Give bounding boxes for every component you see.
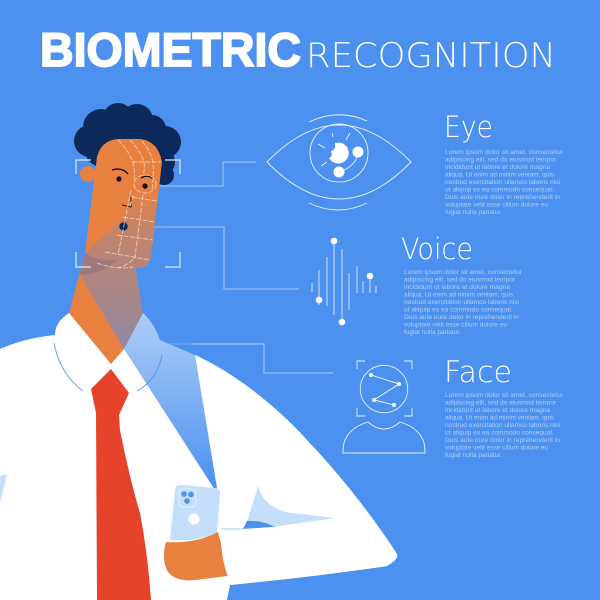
forearm xyxy=(221,518,390,585)
tie xyxy=(91,369,151,600)
text: face: Duis aute irure dolor in reprehenderit in xyxy=(445,437,560,444)
icon: voice waveform xyxy=(312,238,376,325)
face scan frame xyxy=(76,160,180,267)
text: voice: Lorem ipsum dolor sit amet, consectetur xyxy=(404,269,523,276)
text: voice xyxy=(401,232,523,336)
text: eye: Duis aute irure dolor in reprehenderit in xyxy=(445,194,560,201)
face features xyxy=(112,169,153,231)
hand xyxy=(164,532,228,580)
neck shadow xyxy=(79,253,117,275)
sleeve fold xyxy=(243,486,335,529)
text: face: voluptate velit esse cillum dolore eu xyxy=(445,444,548,452)
text: face: ut aliquip ex ea commodo consequat. xyxy=(445,430,554,436)
title xyxy=(40,23,556,76)
shirt xyxy=(0,313,397,600)
text: voice: ut aliquip ex ea commodo consequat. xyxy=(404,306,513,314)
connector lines xyxy=(133,162,333,373)
collar lines xyxy=(54,343,162,391)
hair xyxy=(74,103,181,185)
text: voice: adipiscing elit, sed do eiusmod tempor xyxy=(404,276,516,284)
head xyxy=(85,139,162,268)
face scan mesh xyxy=(97,140,161,268)
text: voice: fugiat nulla pariatur. xyxy=(404,329,461,336)
text: voice: aliqua. Ut enim ad minim veniam, quis xyxy=(404,292,513,298)
text: eye: Lorem ipsum dolor sit amet, consectetur xyxy=(445,149,564,156)
text: eye: voluptate velit esse cillum dolore eu xyxy=(445,202,548,208)
text: voice: nostrud exercitation ullamco laboris nisi xyxy=(404,299,519,306)
scan beam xyxy=(79,190,217,490)
text: face: aliqua. Ut enim ad minim veniam, quis xyxy=(445,414,554,422)
text: eye xyxy=(444,110,564,216)
text: eye: aliqua. Ut enim ad minim veniam, quis xyxy=(445,172,554,178)
text: voice: incididunt ut labore et dolore magna xyxy=(404,284,510,291)
text: face: incididunt ut labore et dolore magna xyxy=(445,407,550,414)
neck xyxy=(69,253,143,364)
ear xyxy=(80,166,96,182)
icon: eye xyxy=(267,115,411,210)
text: voice: voluptate velit esse cillum dolore eu xyxy=(404,322,507,328)
text: face xyxy=(444,355,564,459)
text: eye: ut aliquip ex ea commodo consequat. xyxy=(445,186,554,194)
icon: face xyxy=(343,361,425,453)
phone xyxy=(170,485,220,540)
text: voice: Voice xyxy=(401,232,473,266)
text: voice: Duis aute irure dolor in reprehenderit in xyxy=(404,314,519,321)
text: eye: adipiscing elit, sed do eiusmod tempor xyxy=(445,156,557,164)
text: eye: fugiat nulla pariatur. xyxy=(445,209,502,216)
text: eye: incididunt ut labore et dolore magna xyxy=(445,164,550,171)
left shirt fold xyxy=(0,474,7,503)
text: face: Face xyxy=(444,355,512,389)
text: eye: Eye xyxy=(444,110,493,144)
text: eye: nostrud exercitation ullamco laboris nisi xyxy=(445,179,560,186)
title: RECOGNITION xyxy=(306,36,556,76)
title: BIOMETRIC xyxy=(40,23,301,76)
cuff line xyxy=(221,528,243,530)
gap under arm xyxy=(243,521,275,529)
text: face: fugiat nulla pariatur. xyxy=(445,452,502,459)
text: face: nostrud exercitation ullamco laboris nisi xyxy=(445,422,560,429)
person illustration xyxy=(0,103,397,600)
text: face: adipiscing elit, sed do eiusmod tempor xyxy=(445,400,557,406)
text: face: Lorem ipsum dolor sit amet, consectetur xyxy=(445,392,564,399)
